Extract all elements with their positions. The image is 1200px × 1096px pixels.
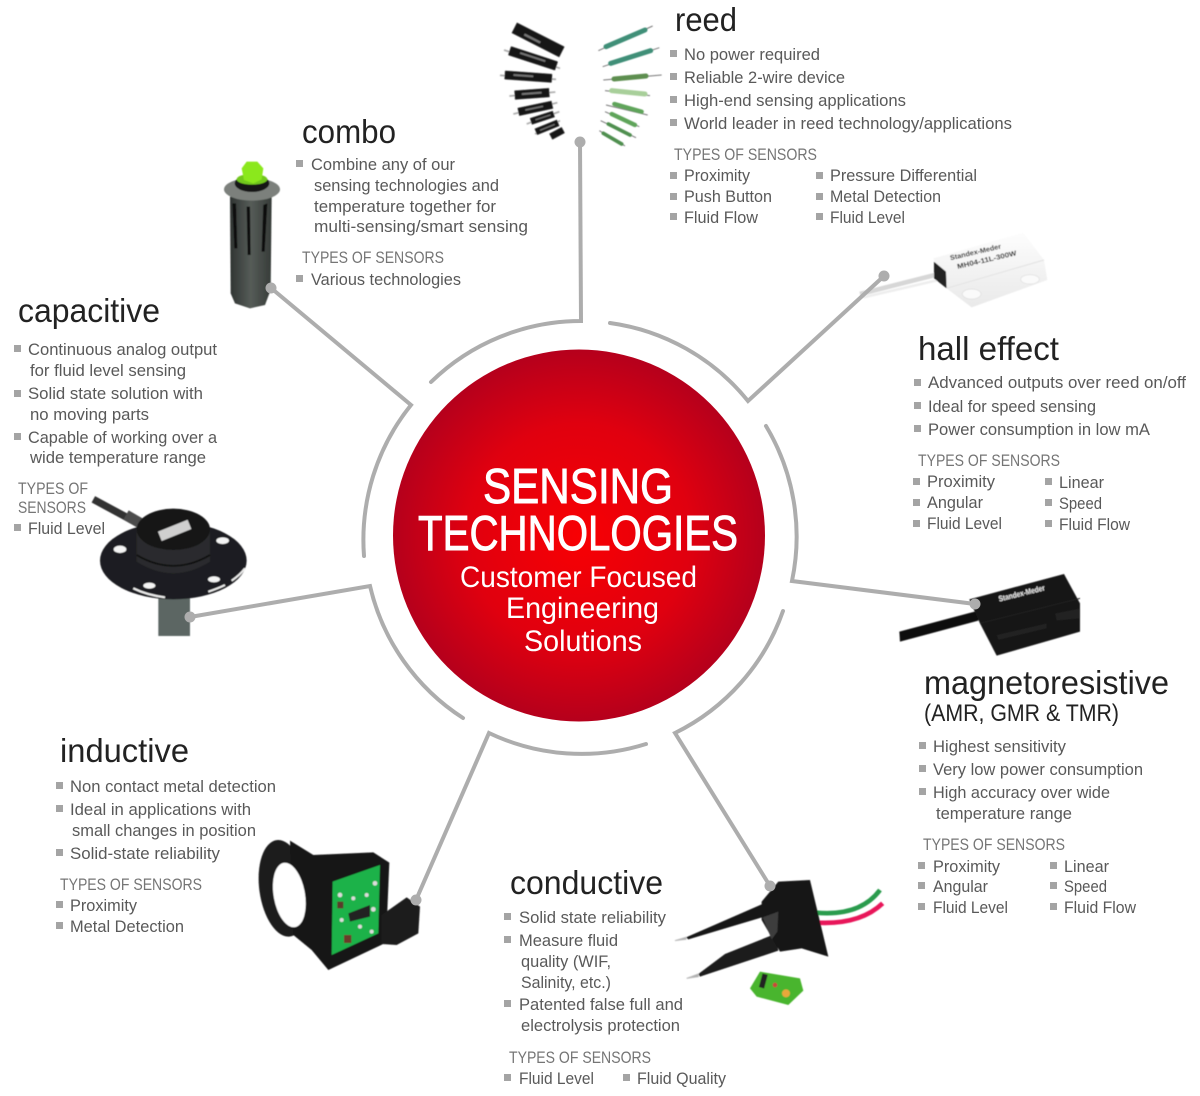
feature text: combo — [296, 155, 528, 236]
subtitle: Engineering — [506, 592, 659, 625]
feature list: inductive — [56, 777, 276, 863]
sensor types list: hall effect: Fluid Level — [927, 514, 1002, 533]
sensor types list: reed: Pressure Differential — [830, 166, 977, 185]
sensor types list: reed — [670, 166, 977, 227]
heading: capacitive: capacitive — [18, 292, 160, 329]
sensor types list: magnetoresistive — [918, 857, 1137, 917]
sensor types list: reed: Fluid Flow — [684, 208, 759, 227]
product label — [950, 240, 1018, 272]
connector: conductive — [675, 611, 783, 892]
sensor types list: reed: Metal Detection — [830, 187, 941, 206]
feature text: combo: multi-sensing/smart sensing — [314, 217, 528, 236]
feature list: magnetoresistive: temperature range — [936, 804, 1072, 823]
icon: inductive sensor — [253, 837, 420, 970]
heading: conductive: conductive — [510, 864, 663, 901]
sensor types heading: magnetoresistive: TYPES OF SENSORS — [923, 835, 1065, 854]
feature list: hall effect: Power consumption in low mA — [928, 420, 1151, 439]
sensor types list: magnetoresistive: Speed — [1064, 877, 1107, 896]
sensor types heading: capacitive: TYPES OF — [18, 479, 88, 498]
feature list: inductive: small changes in position — [72, 821, 256, 840]
feature list: conductive: quality (WIF, — [521, 952, 611, 971]
connector: reed — [431, 136, 586, 382]
subheading: magnetoresistive: (AMR, GMR & TMR) — [924, 700, 1119, 727]
feature list: conductive: electrolysis protection — [521, 1016, 680, 1035]
heading: magnetoresistive: magnetoresistive — [924, 664, 1169, 701]
product label: Standex-Meder — [950, 244, 1002, 262]
feature text: combo: temperature together for — [314, 197, 496, 216]
icon: hall effect sensor — [860, 233, 1047, 307]
sensor types list: hall effect: Speed — [1059, 494, 1102, 513]
sensor types heading: reed: TYPES OF SENSORS — [674, 145, 817, 164]
feature list: reed: Reliable 2-wire device — [684, 68, 845, 87]
main title: TECHNOLOGIES — [418, 507, 738, 561]
product label: Standex-Meder — [998, 583, 1046, 604]
feature list: conductive: Solid state reliability — [519, 908, 666, 927]
feature list: inductive: Ideal in applications with — [70, 800, 251, 819]
feature list: capacitive: Continuous analog output — [28, 340, 217, 359]
sensor types heading: inductive: TYPES OF SENSORS — [60, 875, 202, 894]
sensor types list: inductive: Proximity — [70, 896, 137, 915]
feature list: magnetoresistive: Highest sensitivity — [933, 737, 1066, 756]
panel: conductive — [504, 864, 726, 1088]
connector: magnetoresistive — [766, 426, 980, 610]
feature list: reed: No power required — [684, 45, 820, 64]
sensor types list: magnetoresistive: Proximity — [933, 857, 1000, 876]
feature list: capacitive: Solid state solution with — [28, 384, 203, 403]
connector: hall effect — [610, 270, 890, 401]
sensor types list: magnetoresistive: Fluid Level — [933, 898, 1008, 917]
feature list: magnetoresistive — [919, 737, 1143, 823]
feature list: capacitive — [14, 340, 218, 467]
sensor types list: conductive: Fluid Level — [519, 1069, 594, 1088]
sensor types heading: conductive: TYPES OF SENSORS — [509, 1048, 651, 1067]
sensor types list: hall effect: Proximity — [927, 472, 995, 491]
panel: capacitive — [14, 292, 218, 538]
connector: inductive — [410, 733, 646, 906]
feature list: capacitive: for fluid level sensing — [30, 361, 186, 380]
connector: capacitive — [184, 586, 463, 718]
feature list: hall effect: Ideal for speed sensing — [928, 397, 1096, 416]
main title: SENSING — [483, 460, 673, 514]
product label: MH04-11L-300W — [957, 250, 1018, 271]
main title — [418, 460, 738, 561]
feature list: hall effect: Advanced outputs over reed on/off — [928, 373, 1186, 392]
sensor types heading: capacitive — [18, 479, 88, 517]
sensor types list: conductive: Fluid Quality — [637, 1069, 726, 1088]
central red circle with title — [393, 350, 765, 722]
sensor types list: reed: Push Button — [684, 187, 772, 206]
sensor types heading: capacitive: SENSORS — [18, 498, 86, 517]
heading: combo: combo — [302, 113, 396, 150]
icon: capacitive level sensor — [93, 499, 247, 636]
feature list: capacitive: no moving parts — [30, 405, 149, 424]
sensor types list: hall effect: Angular — [927, 493, 983, 512]
sensor types list: capacitive: Fluid Level — [28, 519, 105, 538]
heading: reed: reed — [675, 1, 737, 38]
feature list: inductive: Non contact metal detection — [70, 777, 276, 796]
sensor types list: hall effect — [913, 472, 1131, 534]
sensor types list: magnetoresistive: Linear — [1064, 857, 1109, 876]
connector: combo — [266, 282, 411, 556]
feature list: magnetoresistive: High accuracy over wide — [933, 783, 1110, 802]
icon: combo sensor — [224, 162, 280, 308]
sensor types heading: hall effect: TYPES OF SENSORS — [918, 451, 1060, 470]
panel: magnetoresistive — [918, 664, 1169, 917]
feature list: capacitive: Capable of working over a — [28, 428, 218, 447]
icon: magnetoresistive sensor — [899, 574, 1080, 656]
feature list: conductive: Patented false full and — [519, 995, 683, 1014]
sensor types list: inductive — [56, 896, 184, 936]
sensor types list: reed: Fluid Level — [830, 208, 905, 227]
panel: reed — [670, 1, 1012, 227]
panel: combo — [296, 113, 528, 289]
feature list: hall effect — [914, 373, 1186, 439]
feature list: reed — [670, 45, 1012, 133]
sensor types list: magnetoresistive: Angular — [933, 877, 988, 896]
feature list: inductive: Solid-state reliability — [70, 844, 220, 863]
feature text: combo: sensing technologies and — [314, 176, 499, 195]
feature list: magnetoresistive: Very low power consumption — [933, 760, 1143, 779]
icon: conductive sensor — [675, 880, 883, 1005]
feature list: capacitive: wide temperature range — [29, 448, 206, 467]
feature list: reed: High-end sensing applications — [684, 91, 906, 110]
sensor types list: conductive — [504, 1069, 726, 1088]
sensor types heading: combo: TYPES OF SENSORS — [302, 248, 444, 267]
feature list: conductive — [504, 908, 683, 1035]
heading: hall effect: hall effect — [918, 330, 1059, 367]
subtitle — [460, 561, 697, 658]
subtitle: Solutions — [524, 625, 642, 658]
sensor types list: combo: Various technologies — [311, 270, 461, 289]
sensor types list: hall effect: Fluid Flow — [1059, 515, 1131, 534]
subtitle: Customer Focused — [460, 561, 697, 594]
feature list: reed: World leader in reed technology/applications — [684, 114, 1012, 133]
feature list: conductive: Salinity, etc.) — [521, 973, 611, 992]
sensor types list: reed: Proximity — [684, 166, 750, 185]
panel: hall effect — [913, 330, 1186, 534]
panel: inductive — [56, 732, 276, 936]
sensor types list: inductive: Metal Detection — [70, 917, 184, 936]
icon: reed sensors and switches — [500, 23, 662, 146]
feature text: combo: Combine any of our — [311, 155, 455, 174]
feature list: conductive: Measure fluid — [519, 931, 618, 950]
sensor types list: magnetoresistive: Fluid Flow — [1064, 898, 1137, 917]
sensor types list: hall effect: Linear — [1059, 473, 1104, 492]
heading: inductive: inductive — [60, 732, 189, 769]
